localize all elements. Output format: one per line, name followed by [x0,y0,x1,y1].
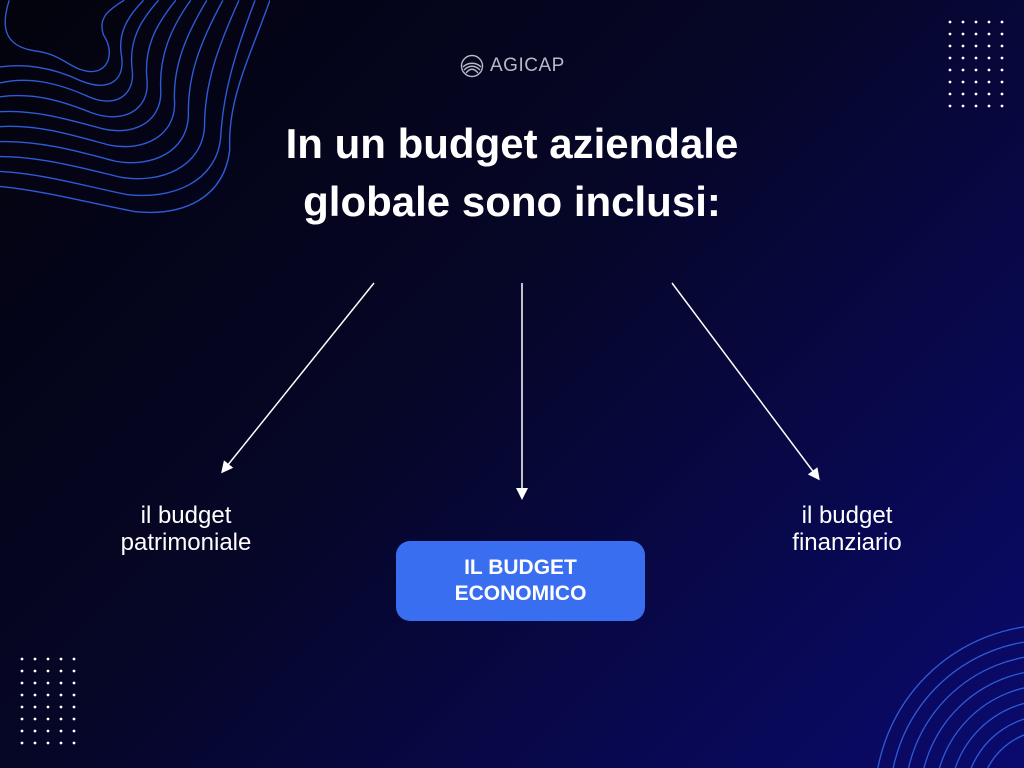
title: In un budget aziendale [286,120,738,167]
decoration: dot grid bottom-left [20,658,76,744]
label: finanziario: il budget [802,502,892,529]
title [286,120,738,225]
arrow: right [672,283,818,478]
logo: AGICAP [460,54,565,78]
arrow: center [521,283,523,497]
decoration: bottom-right concentric arcs [877,626,1024,768]
label: patrimoniale: patrimoniale [121,529,251,556]
label: finanziario [792,502,902,556]
decoration: dot grid top-right [948,20,1004,108]
button: il budget economico [396,541,645,621]
title: globale sono inclusi: [303,178,721,225]
button: il budget economico: IL BUDGET [464,556,577,579]
label: patrimoniale: il budget [141,502,231,529]
label: patrimoniale [121,502,251,556]
arrow: left [223,283,374,471]
label: finanziario: finanziario [792,529,902,556]
decoration: top-left contour lines [0,0,270,214]
logo: AGICAP: AGICAP [490,55,565,76]
button: il budget economico: ECONOMICO [455,582,586,605]
